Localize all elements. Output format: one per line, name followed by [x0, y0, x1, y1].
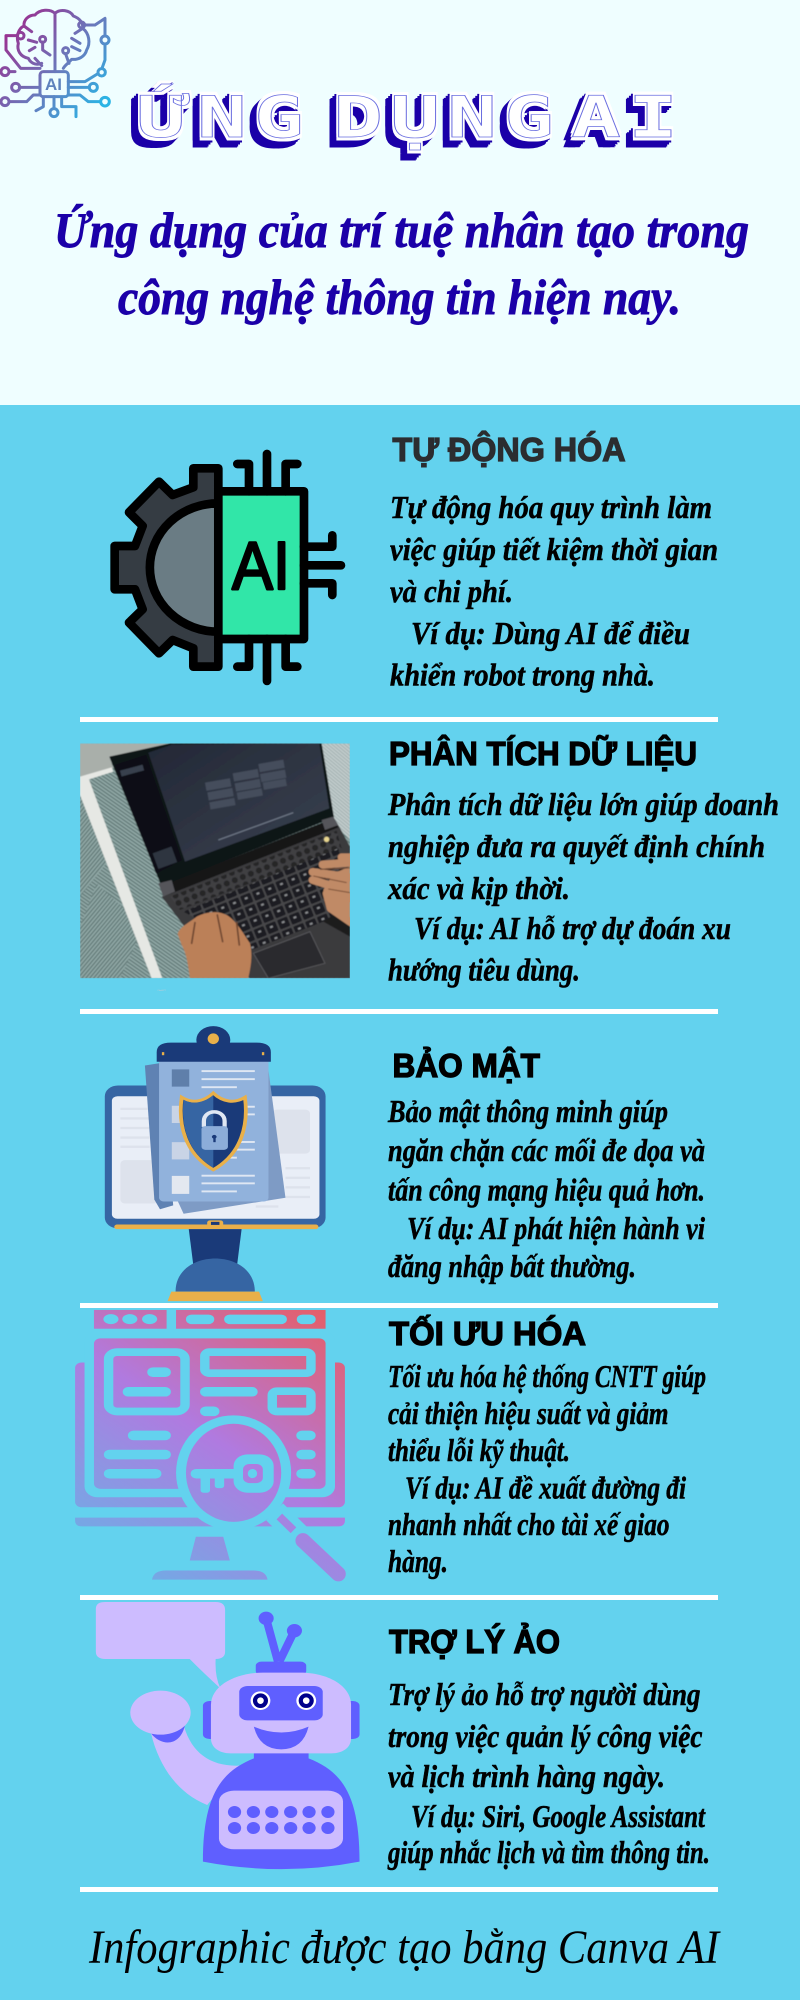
subtitle — [54, 202, 749, 325]
icon: monitor with magnifier and key — [75, 1310, 345, 1580]
text block: và lịch trình hàng ngày. — [388, 1758, 665, 1794]
subtitle: công nghệ thông tin hiện nay. — [118, 269, 681, 325]
heading: PHÂN TÍCH DỮ LIỆU — [389, 735, 697, 772]
icon: gear and AI chip — [115, 454, 341, 681]
panel: Bảo mật — [105, 1026, 705, 1301]
text block: việc giúp tiết kiệm thời gian — [390, 531, 718, 567]
text block: Ví dụ: AI hỗ trợ dự đoán xu — [414, 910, 731, 946]
text block: tấn công mạng hiệu quả hơn. — [388, 1172, 705, 1208]
text block — [387, 1093, 705, 1284]
heading: TỰ ĐỘNG HÓA — [392, 430, 626, 468]
text block: Ví dụ: AI đề xuất đường đi — [405, 1470, 686, 1506]
text block: Tự động hóa quy trình làm — [390, 489, 712, 525]
text block: cải thiện hiệu suất và giảm — [388, 1395, 668, 1431]
text block — [388, 1358, 706, 1579]
icon: computer with security clipboard — [105, 1026, 326, 1301]
text block: thiểu lỗi kỹ thuật. — [388, 1432, 570, 1468]
heading: TỐI ƯU HÓA — [389, 1314, 586, 1352]
text block — [387, 786, 779, 988]
text block: Bảo mật thông minh giúp — [387, 1093, 668, 1129]
text block: xác và kịp thời. — [387, 870, 570, 906]
text block — [390, 489, 718, 692]
title: ỨNG DỤNG AI — [140, 85, 685, 151]
text block: nhanh nhất cho tài xế giao — [388, 1506, 670, 1542]
text block: giúp nhắc lịch và tìm thông tin. — [387, 1834, 710, 1870]
text block: đăng nhập bất thường. — [388, 1248, 636, 1284]
icon: waving robot with speech bubble — [96, 1602, 360, 1869]
panel: Phân tích dữ liệu — [80, 735, 779, 992]
heading: TRỢ LÝ ẢO — [389, 1623, 560, 1660]
panel: Trợ lý ảo — [96, 1602, 710, 1870]
background: blue content band — [0, 405, 800, 2000]
icon: gear and AI chip: AI — [232, 528, 290, 604]
text block: khiển robot trong nhà. — [390, 656, 655, 692]
text block: nghiệp đưa ra quyết định chính — [388, 828, 765, 864]
text block: Trợ lý ảo hỗ trợ người dùng — [388, 1676, 700, 1712]
photo: hands typing on a laptop: ChatGPT — [157, 989, 167, 992]
heading: BẢO MẬT — [392, 1047, 540, 1084]
photo: hands typing on a laptop — [80, 743, 350, 992]
text block: hướng tiêu dùng. — [388, 952, 580, 988]
text block: hàng. — [388, 1543, 448, 1579]
text block: Ví dụ: Siri, Google Assistant — [411, 1798, 706, 1834]
panel: Tự động hóa — [115, 430, 718, 692]
text block: Ví dụ: Dùng AI để điều — [411, 615, 690, 651]
text block: Ví dụ: AI phát hiện hành vi — [407, 1210, 705, 1246]
icon: AI brain logo — [1, 10, 109, 117]
text block: và chi phí. — [390, 573, 513, 609]
icon: AI brain logo: AI — [45, 75, 62, 94]
text block: trong việc quản lý công việc — [388, 1718, 702, 1754]
footer credit: Infographic được tạo bằng Canva AI — [88, 1921, 721, 1974]
text block — [387, 1676, 710, 1870]
subtitle: Ứng dụng của trí tuệ nhân tạo trong — [54, 202, 749, 258]
panel: Tối ưu hóa — [75, 1310, 706, 1580]
text block: ngăn chặn các mối đe dọa và — [388, 1132, 705, 1168]
